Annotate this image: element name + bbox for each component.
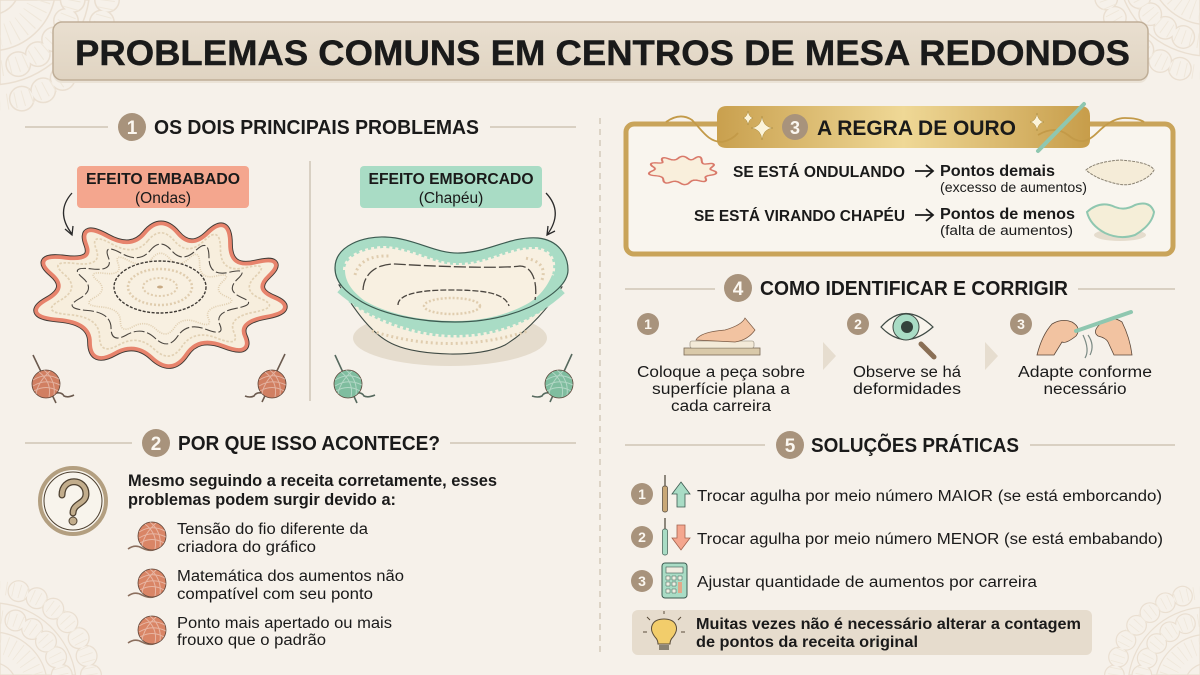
rule 1: SE ESTÁ ONDULANDO xyxy=(733,164,905,181)
illustration: wavy doily xyxy=(39,226,282,364)
icon: ruffled plate xyxy=(1086,160,1154,185)
decorative corner doily top left xyxy=(0,0,107,103)
badge 4: 4 xyxy=(733,279,744,300)
icon: crochet hook xyxy=(1038,104,1084,151)
step 2 xyxy=(847,313,961,398)
rule 1: (excesso de aumentos) xyxy=(940,180,1087,195)
label: efeito emborcado xyxy=(360,166,542,208)
tip box: de pontos da receita original xyxy=(696,634,918,651)
badge 4 xyxy=(724,274,752,302)
intro text xyxy=(128,472,497,509)
rule 1 xyxy=(733,163,1087,195)
reason 1: criadora do gráfico xyxy=(177,539,316,556)
badge 5 xyxy=(776,431,804,459)
badge 5: 5 xyxy=(785,436,796,457)
reason 2: Matemática dos aumentos não xyxy=(177,568,404,585)
step 3: Adapte conforme xyxy=(1018,364,1152,381)
label: efeito embabado: (Ondas) xyxy=(135,190,191,207)
badge 2: 2 xyxy=(151,434,161,455)
badge 1: 1 xyxy=(127,118,138,139)
badge 2 xyxy=(142,429,170,457)
reason 1: Tensão do fio diferente da xyxy=(177,521,368,538)
icon: small wavy piece xyxy=(650,157,715,184)
rule 2: (falta de aumentos) xyxy=(940,223,1073,238)
step 2: 2 xyxy=(854,316,862,332)
decorative corner doily bottom left xyxy=(0,588,91,675)
reason 2 xyxy=(128,568,404,603)
heading 2: POR QUE ISSO ACONTECE? xyxy=(178,433,440,455)
step 1: 1 xyxy=(644,316,652,332)
solution 2: 2 xyxy=(638,529,646,545)
reason 1 xyxy=(128,521,368,556)
solution 3: 3 xyxy=(638,573,646,589)
label: efeito emborcado: (Chapéu) xyxy=(419,190,483,207)
icon: question mark xyxy=(40,468,106,534)
title xyxy=(53,22,1148,83)
heading 3: A REGRA DE OURO xyxy=(817,117,1016,140)
solution 3 xyxy=(631,563,1037,598)
reason 3 xyxy=(128,615,392,649)
intro text: problemas podem surgir devido a: xyxy=(128,491,396,509)
solution 2 xyxy=(631,518,1163,555)
tip box: Muitas vezes não é necessário alterar a contagem xyxy=(696,616,1081,633)
gold banner xyxy=(717,106,1090,148)
step 3: necessário xyxy=(1044,381,1126,398)
step 3 xyxy=(1010,312,1152,398)
solution 2: Trocar agulha por meio número MENOR (se está embabando) xyxy=(697,531,1163,548)
icon: green yarn and hook xyxy=(334,355,375,403)
step 1: Coloque a peça sobre xyxy=(637,364,805,381)
rule 1: Pontos demais xyxy=(940,163,1055,180)
arrow between steps xyxy=(823,342,836,370)
title: PROBLEMAS COMUNS EM CENTROS DE MESA REDONDOS xyxy=(75,34,1130,73)
step 1 xyxy=(637,313,805,415)
reason 3: frouxo que o padrão xyxy=(177,632,326,649)
rule 2: Pontos de menos xyxy=(940,206,1075,223)
gold frame xyxy=(626,124,1173,254)
solution 3: Ajustar quantidade de aumentos por carreira xyxy=(697,574,1037,591)
gold yarn swirls xyxy=(666,116,1144,142)
arrow to wavy doily xyxy=(64,193,73,235)
icon: small bowl xyxy=(1087,204,1154,241)
section 5: soluções práticas xyxy=(625,431,1175,655)
label: efeito embabado: EFEITO EMBABADO xyxy=(86,171,240,188)
sparkles xyxy=(743,111,1044,140)
icon: green yarn and hook xyxy=(532,354,573,402)
step 3: 3 xyxy=(1017,316,1025,332)
intro text: Mesmo seguindo a receita corretamente, esses xyxy=(128,472,497,490)
arrow to bowl xyxy=(546,193,555,235)
illustration: hat-shaped bowl xyxy=(335,237,568,366)
heading 1: OS DOIS PRINCIPAIS PROBLEMAS xyxy=(154,117,479,139)
label: efeito embabado xyxy=(77,166,249,208)
badge 1 xyxy=(118,113,146,141)
reason 2: compatível com seu ponto xyxy=(177,586,373,603)
decorative corner doily top right xyxy=(1102,0,1200,72)
tip box xyxy=(632,610,1092,655)
arrow between steps xyxy=(985,342,998,370)
section 3: a regra de ouro xyxy=(626,104,1173,254)
solution 1: Trocar agulha por meio número MAIOR (se está emborcando) xyxy=(697,488,1162,505)
icon: yarn and hook xyxy=(245,354,286,402)
heading 5: SOLUÇÕES PRÁTICAS xyxy=(811,433,1019,457)
decorative corner doily bottom right xyxy=(1114,593,1200,675)
section 4: como identificar e corrigir xyxy=(625,274,1175,415)
step 2: Observe se há xyxy=(853,364,961,381)
reason 3: Ponto mais apertado ou mais xyxy=(177,615,392,632)
step 1: cada carreira xyxy=(671,398,771,415)
icon: yarn and hook xyxy=(32,355,74,403)
step 2: deformidades xyxy=(853,381,961,398)
badge 3 xyxy=(782,114,808,140)
solution 1 xyxy=(631,475,1162,512)
heading 4: COMO IDENTIFICAR E CORRIGIR xyxy=(760,278,1069,300)
badge 3: 3 xyxy=(790,118,800,138)
rule 2: SE ESTÁ VIRANDO CHAPÉU xyxy=(694,208,905,225)
solution 1: 1 xyxy=(638,486,646,502)
section 1: os dois principais problemas xyxy=(25,113,576,403)
label: efeito emborcado: EFEITO EMBORCADO xyxy=(368,171,534,188)
step 1: superfície plana a xyxy=(652,381,790,398)
rule 2 xyxy=(694,206,1075,238)
center dashed divider xyxy=(599,118,601,652)
icon: light bulb xyxy=(643,611,685,650)
section 2: por que isso acontece xyxy=(25,429,576,649)
